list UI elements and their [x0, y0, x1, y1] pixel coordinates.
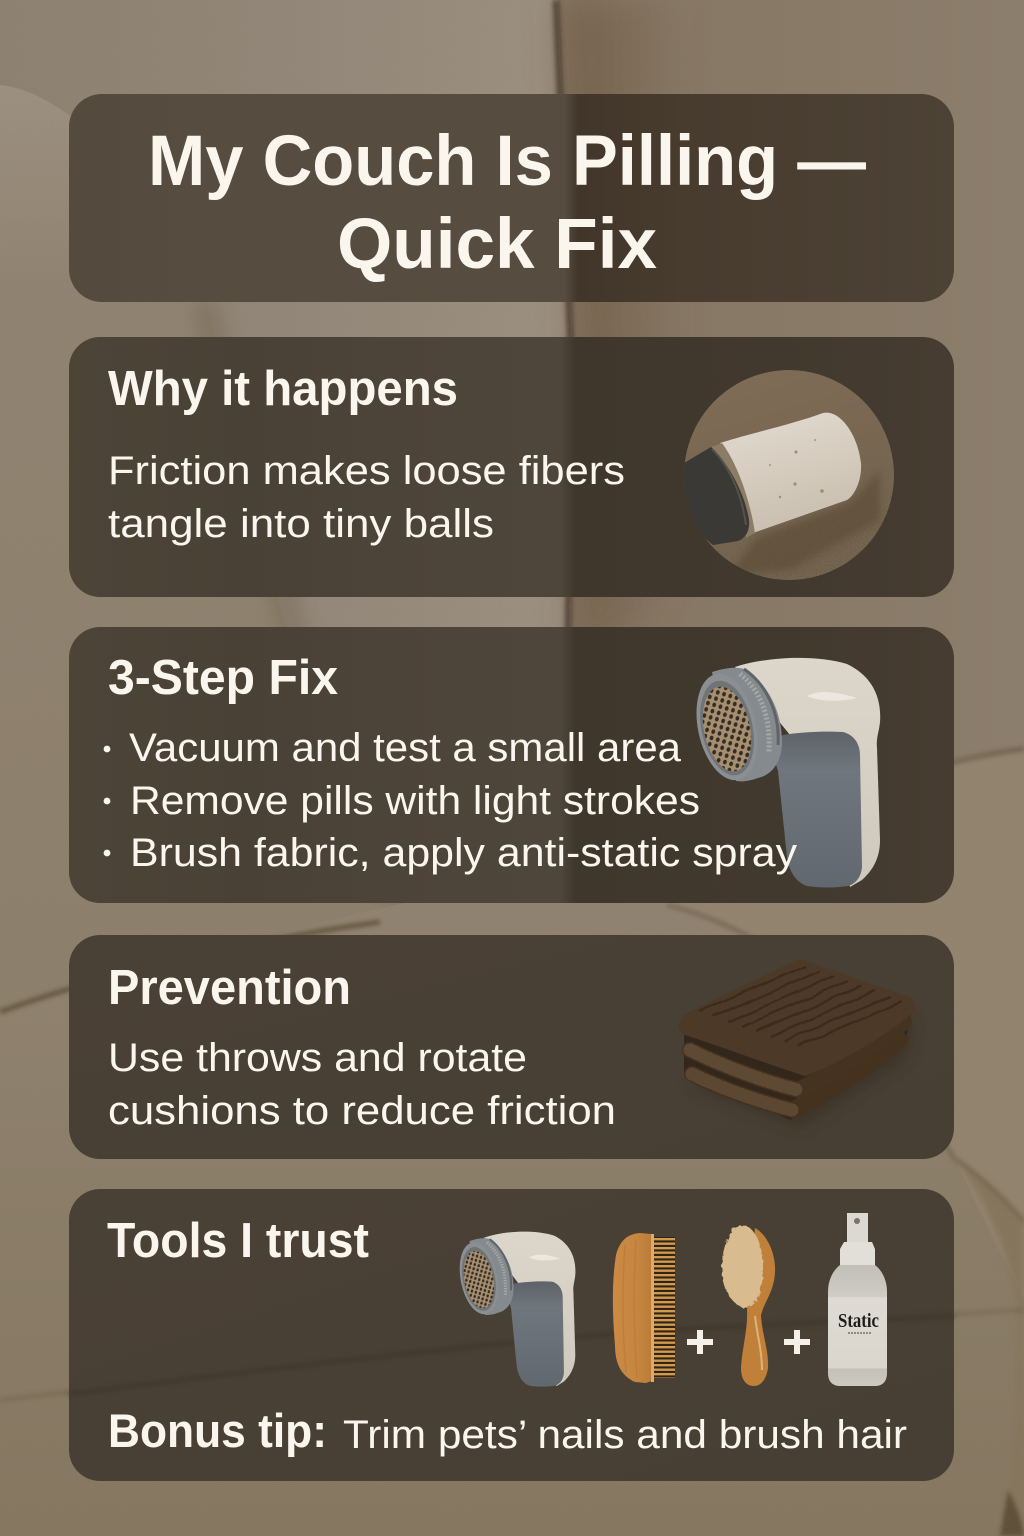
panel: why it happens: [69, 337, 954, 597]
icon: wooden comb: [613, 1233, 675, 1383]
panel: 3-step fix: [69, 627, 954, 903]
plus sign: [784, 1330, 810, 1354]
bonus tip: Trim pets’ nails and brush hair: [343, 1413, 907, 1457]
bonus tip: [108, 1404, 907, 1457]
title: My Couch Is Pilling —: [148, 122, 866, 201]
panel: prevention: [69, 935, 954, 1159]
icon: fabric shaver: [687, 658, 880, 888]
text: why it happens: tangle into tiny balls: [108, 502, 494, 546]
icon: lint roller on fabric: [680, 370, 900, 590]
panel: tools: [69, 1189, 954, 1481]
icon: bristle brush: [722, 1225, 775, 1386]
step list: Brush fabric, apply anti-static spray: [130, 831, 797, 875]
text: prevention: Use throws and rotate: [108, 1036, 527, 1080]
heading: why it happens: Why it happens: [108, 362, 458, 416]
title: [148, 122, 866, 284]
text: why it happens: [108, 449, 625, 546]
icon: folded throw blanket: [684, 964, 915, 1128]
bonus tip: Bonus tip:: [108, 1404, 327, 1457]
heading: tools i trust: Tools I trust: [107, 1214, 369, 1268]
heading: prevention: Prevention: [108, 961, 351, 1015]
heading: 3-step fix: 3-Step Fix: [108, 651, 338, 705]
title: Quick Fix: [337, 205, 657, 284]
step list: Vacuum and test a small area: [129, 726, 682, 770]
panel: title: [69, 94, 954, 302]
text: prevention: [108, 1036, 616, 1133]
step list: Remove pills with light strokes: [130, 779, 700, 823]
text: why it happens: Friction makes loose fibers: [108, 449, 625, 493]
text: prevention: cushions to reduce friction: [108, 1089, 616, 1133]
bottle label: Static: [838, 1310, 879, 1332]
step list: [104, 726, 797, 875]
plus sign: [687, 1330, 713, 1354]
icon: anti-static spray bottle: [828, 1213, 887, 1386]
icon: small fabric shaver: [454, 1232, 575, 1387]
